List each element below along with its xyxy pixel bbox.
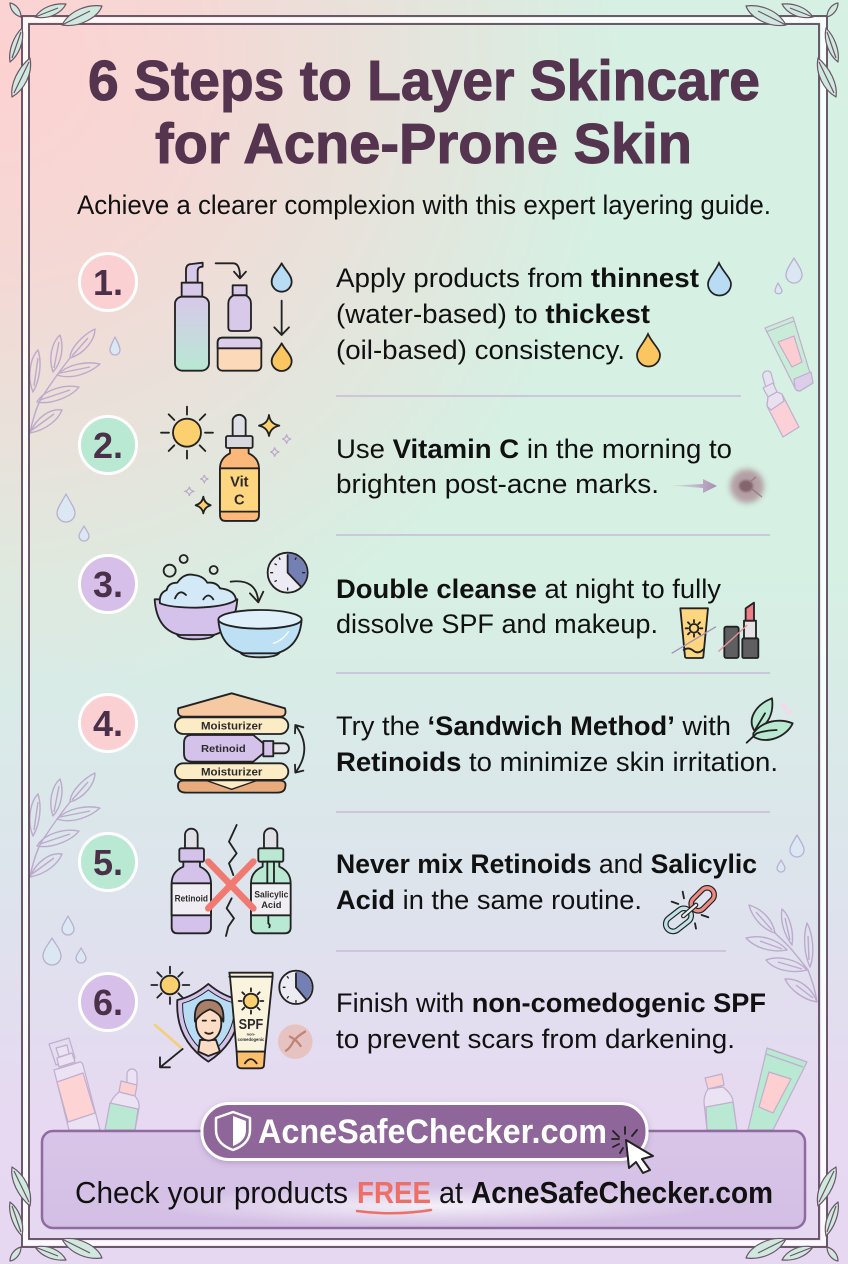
- step 4 text: Retinoids to minimize skin irritation.: [336, 747, 778, 777]
- step 4 text: [336, 711, 778, 777]
- panel text: FREE: [357, 1175, 431, 1210]
- step 4 icon: moisturizer sandwich: Moisturizer: [201, 766, 262, 778]
- decorative bottles, bottom left: [49, 1038, 139, 1130]
- step 1 icon: bottles and drops: [175, 263, 292, 371]
- step 1: [80, 254, 731, 371]
- icon: broken chain link: [663, 885, 717, 934]
- step 4 number badge: [80, 694, 136, 752]
- icon: sunscreen and lipstick crossed out: [672, 603, 758, 658]
- step 2 text: Use Vitamin C in the morning to: [336, 434, 732, 464]
- step 1 text: (oil-based) consistency.: [336, 335, 625, 365]
- step 2 icon: sun and vitamin C serum: C: [234, 492, 245, 508]
- website pill button: [202, 1104, 653, 1173]
- step 6 icon: sun, shield, SPF tube and clock: comedogenic: [238, 1037, 265, 1042]
- step 5 icon: retinoid and salicylic acid bottles crossed out: Salicylic: [254, 889, 288, 899]
- step 3 text: dissolve SPF and makeup.: [336, 609, 658, 639]
- step 2 number badge: [80, 416, 136, 474]
- step 5 text: [336, 849, 757, 915]
- step 1 text: [336, 263, 699, 365]
- icon: orange oil drop: [637, 334, 660, 366]
- icon: blue water drop: [708, 263, 731, 296]
- icon: cursor: [626, 1140, 653, 1173]
- title: [88, 49, 760, 176]
- icon: click sparks: [612, 1127, 637, 1153]
- step 6: [80, 967, 766, 1068]
- step 5 text: Acid in the same routine.: [336, 885, 642, 915]
- step 5 text: Never mix Retinoids and Salicylic: [336, 849, 757, 879]
- step 6 text: [336, 988, 766, 1054]
- title: for Acne-Prone Skin: [155, 112, 692, 176]
- step 4 icon: moisturizer sandwich: [175, 693, 304, 793]
- step 1 number badge: 1.: [93, 262, 123, 303]
- step 3 text: [336, 574, 722, 639]
- step 4 text: Try the ‘Sandwich Method’ with: [336, 711, 731, 741]
- step 6 icon: sun, shield, SPF tube and clock: non-: [247, 1031, 256, 1036]
- step 5 icon: retinoid and salicylic acid bottles crossed out: Acid: [261, 900, 282, 910]
- step 3 number badge: 3.: [93, 564, 123, 605]
- step 2 text: brighten post-acne marks.: [336, 469, 659, 499]
- step 2 icon: sun and vitamin C serum: Vit: [230, 475, 249, 491]
- title: 6 Steps to Layer Skincare: [88, 49, 760, 113]
- step 2: [80, 407, 764, 521]
- step 3 icon: two bowls and clock: [155, 553, 308, 657]
- step 2 icon: sun and vitamin C serum: [161, 407, 291, 521]
- call to action panel: [42, 1131, 805, 1228]
- step 4 icon: moisturizer sandwich: Moisturizer: [201, 720, 262, 732]
- step 2 text: [336, 434, 732, 499]
- step 6 number badge: 6.: [93, 982, 123, 1023]
- icon: post-acne mark: [730, 469, 764, 503]
- decorative tube and serum, top right: [763, 317, 813, 437]
- panel text: [75, 1175, 773, 1210]
- icon: shield: [216, 1112, 250, 1150]
- step 1 text: (water-based) to thickest: [336, 299, 650, 329]
- step 5: [80, 825, 757, 936]
- step 5 number badge: [80, 834, 136, 890]
- subtitle: Achieve a clearer complexion with this expert layering guide.: [77, 190, 771, 220]
- icon: green leaves: [747, 698, 793, 743]
- step 4: [80, 693, 793, 793]
- step 3 number badge: [80, 556, 136, 612]
- step 2 number badge: 2.: [93, 425, 123, 466]
- step 6 icon: sun, shield, SPF tube and clock: [151, 967, 313, 1068]
- panel text: Check your products: [75, 1175, 348, 1210]
- step 5 icon: retinoid and salicylic acid bottles crossed out: [172, 825, 291, 936]
- decorative background leaves and droplets: [30, 258, 817, 1002]
- decorative bottles, bottom right: [704, 1048, 807, 1130]
- panel text: AcneSafeChecker.com: [471, 1175, 773, 1210]
- panel text: at: [439, 1175, 463, 1210]
- step 5 icon: retinoid and salicylic acid bottles crossed out: Retinoid: [175, 894, 208, 904]
- website label: AcneSafeChecker.com: [258, 1113, 607, 1151]
- step 1 text: Apply products from thinnest: [336, 263, 699, 293]
- step 3: [80, 553, 758, 658]
- step 5 number badge: 5.: [93, 842, 123, 883]
- step 6 number badge: [80, 974, 136, 1030]
- step 4 icon: moisturizer sandwich: Retinoid: [201, 744, 246, 755]
- step 6 text: Finish with non-comedogenic SPF: [336, 988, 766, 1018]
- arrow to post-acne mark: [671, 479, 717, 493]
- step 4 number badge: 4.: [93, 703, 123, 744]
- step 1 number badge: [80, 254, 136, 310]
- step 3 text: Double cleanse at night to fully: [336, 574, 722, 604]
- step 6 text: to prevent scars from darkening.: [336, 1024, 735, 1054]
- FREE underline: [357, 1210, 431, 1213]
- step 6 icon: sun, shield, SPF tube and clock: SPF: [239, 1017, 263, 1033]
